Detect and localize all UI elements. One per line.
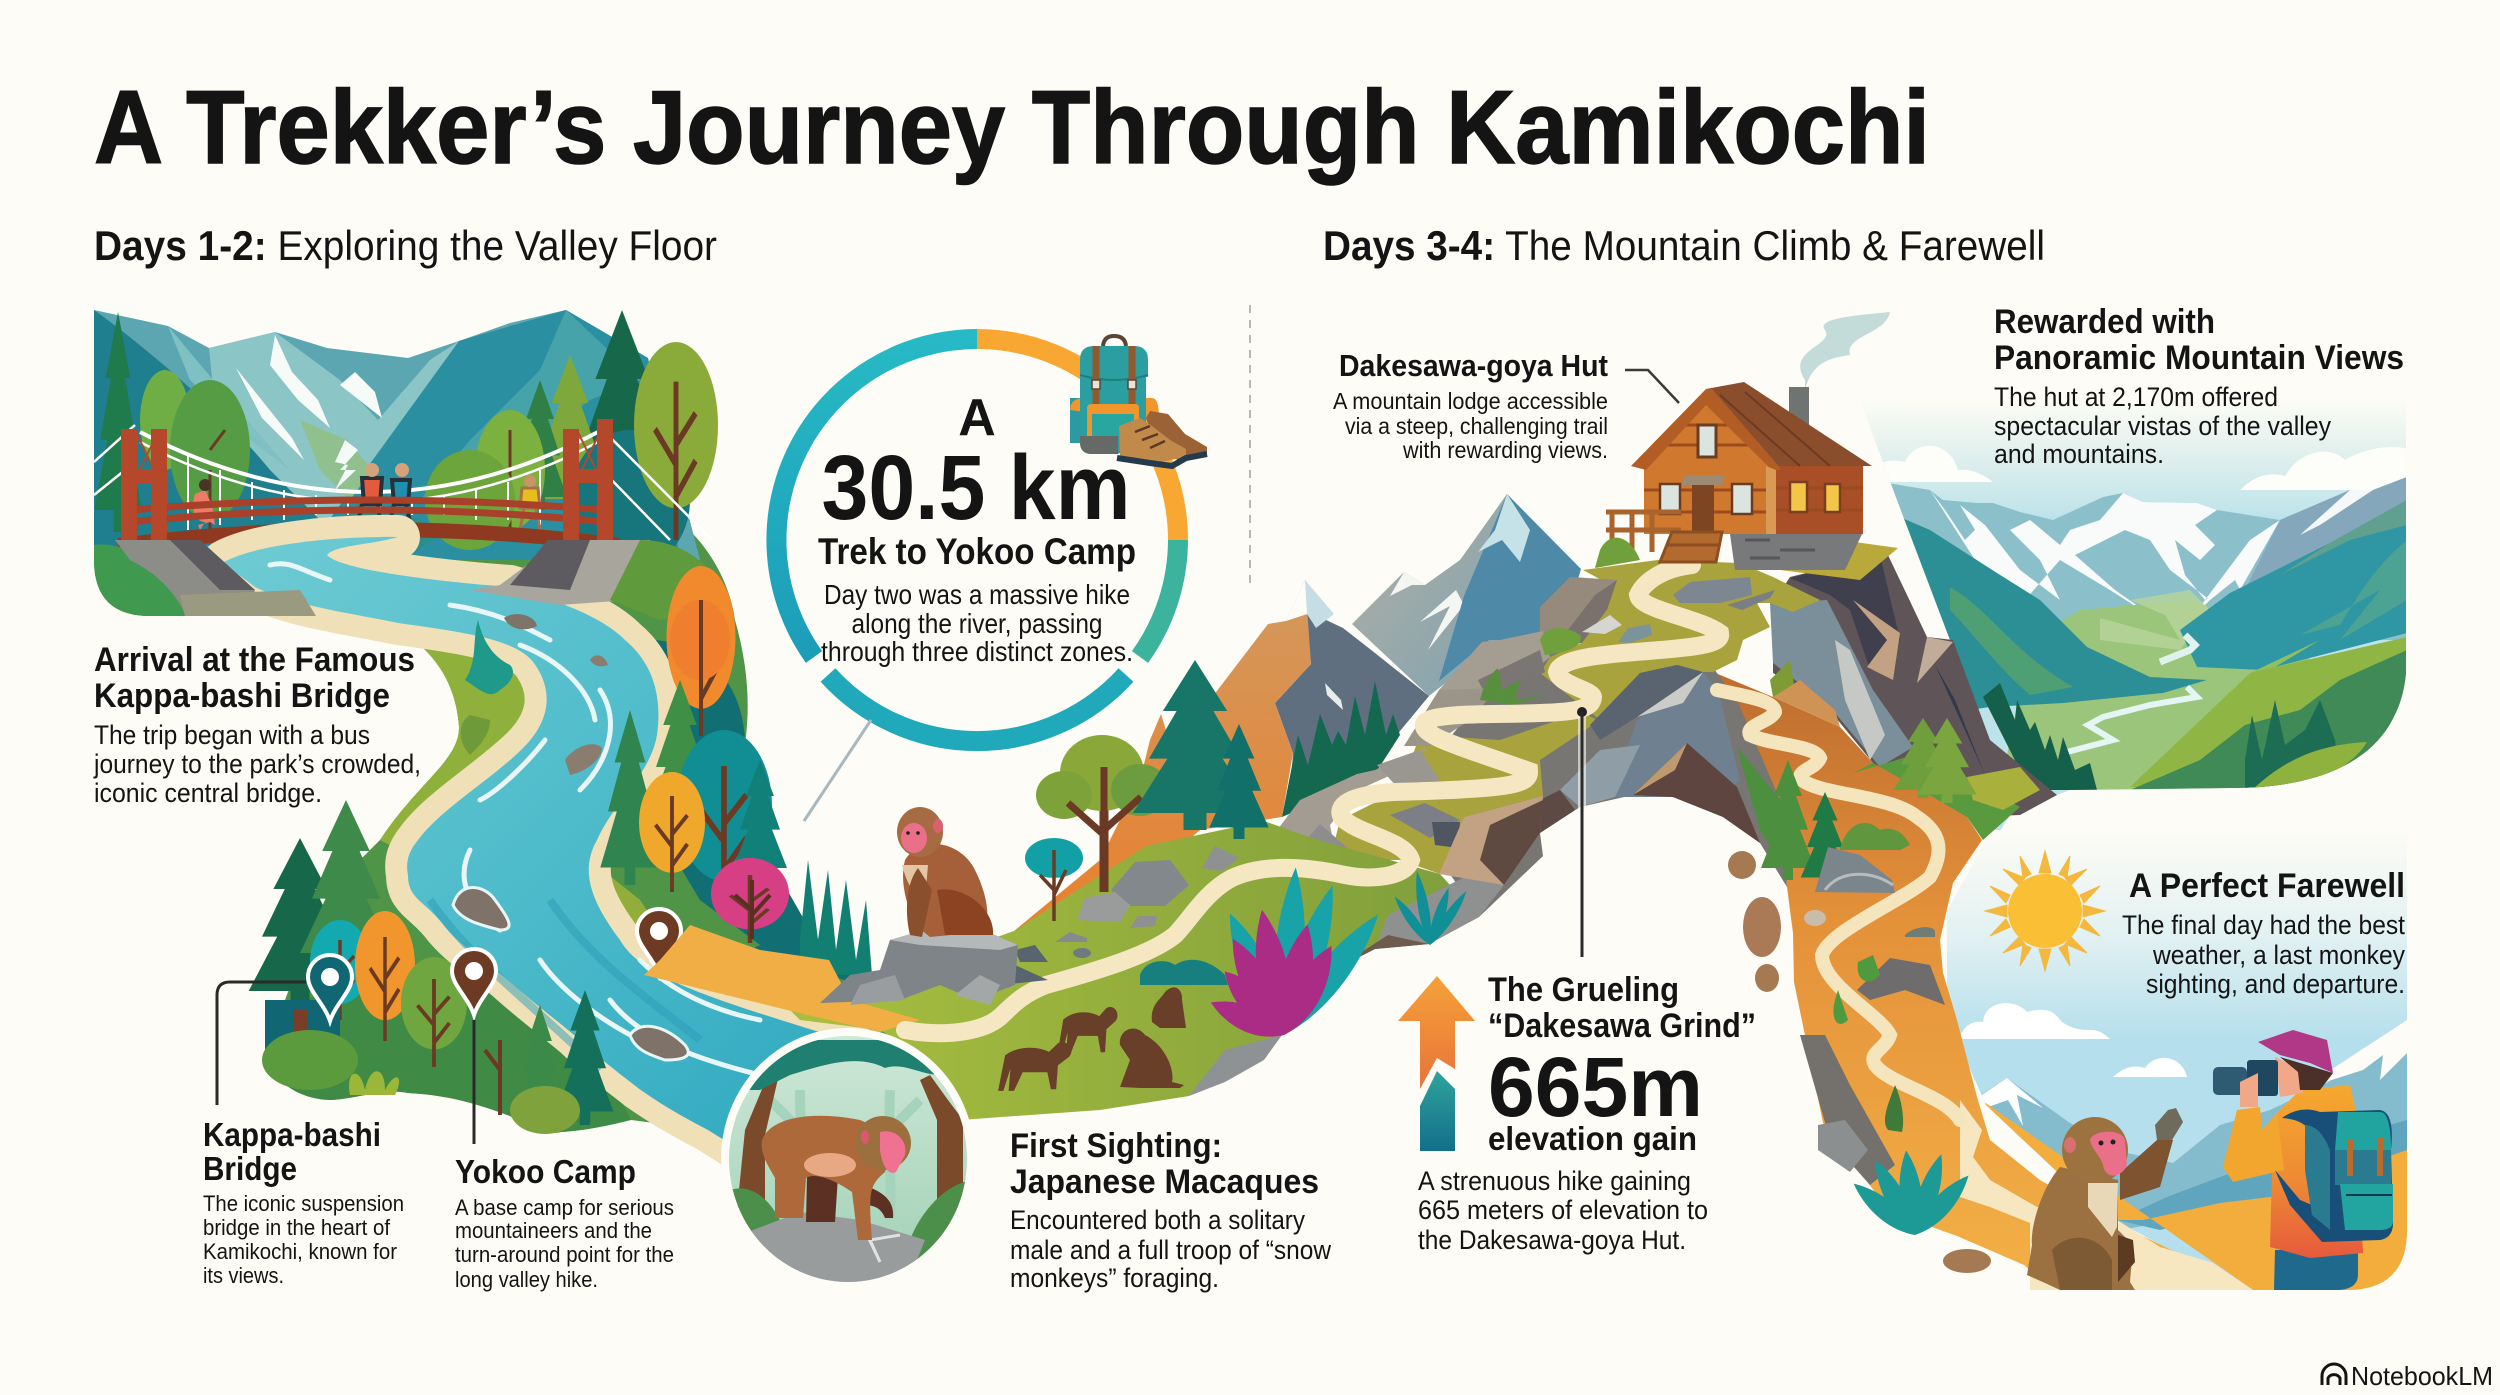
pin: Kappa-bashi Bridge — [308, 955, 352, 1021]
text: panoramic views: spectacular vistas of the valley — [1994, 411, 2331, 441]
icon: backpack and boots — [1070, 336, 1207, 466]
river rocks — [504, 614, 537, 629]
logo: NotebookLM: NotebookLM — [2351, 1361, 2493, 1391]
text: Dakesawa-goya Hut: with rewarding views. — [1402, 437, 1608, 463]
lower rocks — [1189, 1035, 1282, 1096]
text: Yokoo Camp callout — [455, 1153, 674, 1292]
orange trail section — [644, 925, 920, 1032]
text: perfect farewell: A Perfect Farewell — [2129, 867, 2405, 905]
ape troop silhouettes — [998, 987, 1186, 1091]
pin: Yokoo Camp — [452, 949, 496, 1015]
stat ring text: Trek to Yokoo Camp — [818, 531, 1136, 572]
icon: seated macaque — [897, 807, 993, 937]
text: Kappa-bashi Bridge callout: its views. — [203, 1263, 284, 1288]
text: Yokoo Camp callout: Yokoo Camp — [455, 1153, 636, 1190]
text: Kappa-bashi Bridge callout: Kamikochi, known for — [203, 1239, 397, 1264]
river — [2067, 687, 2197, 752]
text: Arrival at Kappa-bashi: Kappa-bashi Bridge — [94, 677, 390, 715]
text: Yokoo Camp callout: mountaineers and the — [455, 1218, 652, 1243]
valley floor — [2000, 600, 2330, 790]
details: farewell band rocks and plants — [1761, 760, 1945, 1185]
trees: behind bridge — [94, 310, 718, 570]
text: Dakesawa Grind: The Grueling — [1488, 971, 1679, 1009]
sand banks and river — [224, 537, 850, 1150]
stat ring text: Day two was a massive hike — [824, 579, 1130, 610]
leader line: Yokoo — [472, 1020, 476, 1144]
text: Yokoo Camp callout: A base camp for serious — [455, 1195, 674, 1220]
scene: trail slope band — [1713, 672, 2253, 1290]
left teal slope — [1904, 519, 2207, 709]
plants: fuchsia and teal fronds — [1140, 866, 1470, 1047]
text: Kappa-bashi Bridge callout: Kappa-bashi — [203, 1116, 381, 1153]
text: panoramic views — [1994, 303, 2404, 469]
text: First Sighting: First Sighting: — [1010, 1127, 1222, 1165]
blue mountains — [1977, 1020, 2407, 1230]
text: Dakesawa-goya Hut: via a steep, challenging trail — [1345, 413, 1608, 439]
text: Arrival at Kappa-bashi: iconic central bridge. — [94, 778, 322, 808]
stat ring text: A — [958, 389, 996, 447]
section heading: days 1-2: Days 1-2: Exploring the Valley Floor — [94, 222, 717, 269]
text: Dakesawa-goya Hut — [1333, 348, 1608, 463]
text: perfect farewell — [2122, 867, 2405, 999]
monkey rock — [820, 920, 1018, 1005]
leader: grind line — [1577, 707, 1587, 957]
dark right cliff — [1773, 553, 2057, 817]
text: Dakesawa Grind: the Dakesawa-goya Hut. — [1418, 1225, 1686, 1255]
text: Dakesawa-goya Hut: Dakesawa-goya Hut — [1339, 348, 1608, 383]
dark pines — [1983, 683, 2097, 790]
distant range — [1870, 477, 2407, 640]
text: perfect farewell: The final day had the best — [2122, 910, 2405, 940]
trail: descent to farewell — [1717, 690, 1960, 1120]
icon: mountain hut — [1595, 312, 1890, 570]
scene: back mountain range — [1014, 494, 1581, 931]
text: First Sighting — [1010, 1127, 1331, 1293]
trees: left cluster — [249, 800, 613, 1134]
title: A Trekker’s Journey Through Kamikochi — [94, 70, 1930, 186]
divider: dashed vertical — [1249, 305, 1251, 587]
medallion: macaque in forest — [720, 1028, 980, 1290]
stat ring: 30.5 km — [776, 339, 1178, 741]
text: Dakesawa Grind: “Dakesawa Grind” — [1488, 1007, 1756, 1045]
scene: central cliff — [1268, 540, 2057, 917]
text: panoramic views: Panoramic Mountain Views — [1994, 339, 2404, 377]
scene: left valley land — [94, 500, 1000, 1170]
mid rocks on trail — [1390, 803, 1460, 838]
text: Dakesawa Grind — [1418, 971, 1756, 1255]
scene: cream beach foreground — [1960, 1100, 2253, 1290]
stepping stones — [1728, 851, 1991, 1273]
stat ring text: along the river, passing — [852, 608, 1102, 639]
rock abutments — [94, 540, 726, 620]
trees and rocks: meadow — [1000, 660, 1269, 985]
panel: panoramic mountain views — [1860, 400, 2410, 835]
section heading: days 3-4: Days 3-4: The Mountain Climb & Farewell — [1323, 222, 2045, 269]
small plants: river left bank — [461, 620, 513, 755]
clouds — [1863, 446, 2410, 490]
leader: ring to valley — [804, 720, 871, 821]
text: Dakesawa-goya Hut: A mountain lodge accessible — [1333, 388, 1608, 414]
text: Dakesawa Grind: elevation gain — [1488, 1120, 1697, 1157]
green slope near farewell — [1853, 757, 2020, 840]
text: panoramic views: and mountains. — [1994, 439, 2164, 469]
illustration: Kappa-bashi suspension bridge — [94, 420, 712, 552]
icon: elevation arrow — [1398, 976, 1475, 1151]
text: First Sighting: Encountered both a solitary — [1010, 1205, 1305, 1235]
trail: Dakesawa trail to hut — [905, 565, 1720, 1033]
text: Kappa-bashi Bridge callout: Bridge — [203, 1150, 297, 1187]
stat ring text — [818, 389, 1136, 667]
olive plateau — [1330, 560, 1820, 874]
leader: hut label — [1625, 370, 1679, 403]
stat ring text: through three distinct zones. — [821, 636, 1133, 667]
orange ground — [1977, 1097, 2407, 1290]
right teal slope — [2180, 500, 2407, 670]
icon: photographer — [2213, 1030, 2393, 1290]
icon: sun — [1985, 851, 2105, 971]
text: Arrival at Kappa-bashi: Arrival at the Famous — [94, 641, 415, 679]
text: Dakesawa Grind: 665m — [1488, 1040, 1703, 1134]
scene: meadow — [644, 796, 1543, 1120]
hikers — [193, 463, 540, 530]
text: panoramic views: The hut at 2,170m offered — [1994, 382, 2278, 412]
plant: teal fronds on farewell slope — [1847, 1149, 1976, 1242]
text: Kappa-bashi Bridge callout — [203, 1116, 404, 1288]
text: Yokoo Camp callout: long valley hike. — [455, 1267, 598, 1292]
text: Kappa-bashi Bridge callout: The iconic suspension — [203, 1191, 404, 1216]
text: Arrival at Kappa-bashi: journey to the park’s crowded, — [93, 749, 421, 779]
text: Yokoo Camp callout: turn-around point for the — [455, 1242, 674, 1267]
text: Dakesawa Grind: A strenuous hike gaining — [1418, 1166, 1691, 1196]
clouds — [1960, 1003, 2110, 1039]
icon: waving macaque — [2027, 1108, 2183, 1290]
text: panoramic views: Rewarded with — [1994, 303, 2215, 341]
scene: farewell sky and hills — [1947, 830, 2407, 1290]
text: First Sighting: Japanese Macaques — [1010, 1163, 1319, 1201]
text: First Sighting: male and a full troop of “snow — [1010, 1235, 1331, 1265]
rock left of trail — [1540, 577, 1617, 650]
text: Arrival at Kappa-bashi — [93, 641, 421, 808]
stat ring text: 30.5 km — [822, 437, 1130, 539]
right hills and forest — [2130, 637, 2407, 787]
text: Arrival at Kappa-bashi: The trip began with a bus — [94, 720, 370, 750]
text: perfect farewell: sighting, and departure. — [2146, 969, 2405, 999]
glacier stream — [2160, 635, 2195, 662]
leader line: Kappa-bashi — [217, 982, 306, 1105]
text: First Sighting: monkeys” foraging. — [1010, 1263, 1219, 1293]
text: Dakesawa Grind: 665 meters of elevation to — [1418, 1195, 1708, 1225]
text: Kappa-bashi Bridge callout: bridge in the heart of — [203, 1215, 391, 1240]
text: perfect farewell: weather, a last monkey — [2152, 940, 2405, 970]
pin: valley trail — [637, 909, 681, 975]
big grey boulder and brown — [1610, 672, 1740, 797]
panel: bridge mountains — [94, 310, 700, 560]
trees: right bank — [600, 566, 872, 975]
